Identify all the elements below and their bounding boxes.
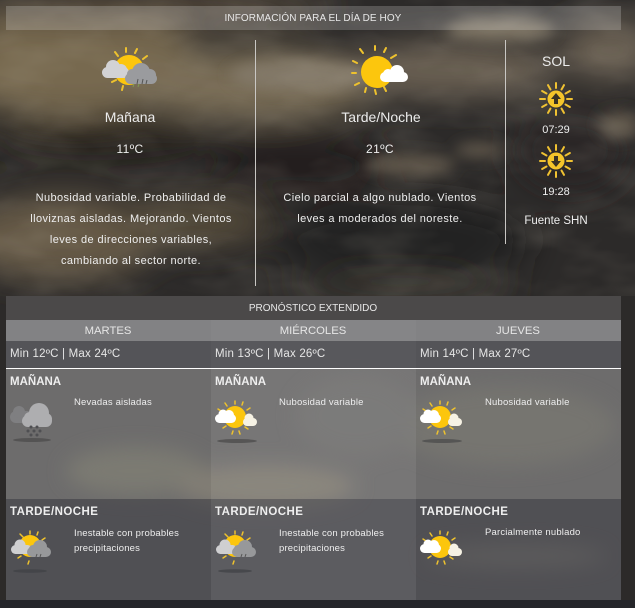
icon: sun clouds [215, 400, 257, 443]
description: leves de direcciones variables, [50, 234, 212, 246]
day: MARTES [85, 325, 131, 337]
column: miercoles [215, 324, 384, 573]
description: Nubosidad variable. Probabilidad de [36, 192, 226, 204]
min max: Min 12ºC | Max 24ºC [10, 348, 120, 360]
afternoon text: Inestable con probables [74, 528, 179, 539]
temperature: 11ºC [116, 142, 144, 156]
icon: sun clouds [420, 400, 462, 443]
panel: sun [524, 53, 588, 227]
afternoon text: Parcialmente nublado [485, 527, 580, 538]
min max: Min 13ºC | Max 26ºC [215, 348, 325, 360]
divider right [505, 40, 506, 244]
heading: PRONÓSTICO EXTENDIDO [249, 303, 377, 314]
morning text: Nubosidad variable [485, 397, 570, 408]
morning heading: MAÑANA [215, 376, 266, 388]
afternoon heading: TARDE/NOCHE [10, 506, 98, 518]
day: JUEVES [496, 325, 540, 337]
morning text: Nevadas aisladas [74, 397, 152, 408]
description: cambiando al sector norte. [61, 255, 201, 267]
column: martes [10, 325, 179, 572]
sunrise time: 07:29 [542, 124, 570, 136]
label: Mañana [105, 109, 155, 125]
divider left [255, 40, 256, 286]
icon: sunset [539, 144, 573, 178]
heading: SOL [542, 53, 570, 69]
afternoon text: precipitaciones [279, 543, 345, 554]
panel: morning today [30, 47, 232, 267]
forecast backdrop [6, 296, 621, 600]
label: Tarde/Noche [341, 109, 421, 125]
panel: afternoon today [283, 45, 477, 225]
description [30, 192, 232, 267]
min max: Min 14ºC | Max 27ºC [420, 348, 530, 360]
description [283, 192, 477, 225]
afternoon text [279, 528, 384, 554]
afternoon text: precipitaciones [74, 543, 140, 554]
description: lloviznas aisladas. Mejorando. Vientos [30, 213, 232, 225]
morning heading: MAÑANA [10, 376, 61, 388]
morning heading: MAÑANA [420, 376, 471, 388]
header: today: INFORMACIÓN PARA EL DÍA DE HOY [225, 13, 401, 24]
icon: sun with white cloud [351, 45, 408, 95]
day: MIÉRCOLES [280, 325, 346, 337]
icon: sun rain cloud [216, 530, 256, 573]
description: leves a moderados del noreste. [297, 213, 463, 225]
source: Fuente SHN [524, 215, 588, 227]
icon: snow cloud [10, 403, 52, 442]
icon: sun with rain cloud [102, 47, 157, 91]
afternoon heading: TARDE/NOCHE [420, 506, 508, 518]
icon: sun rain cloud [11, 530, 51, 572]
temperature: 21ºC [366, 142, 394, 156]
morning text: Nubosidad variable [279, 397, 364, 408]
afternoon text [74, 528, 179, 554]
afternoon heading: TARDE/NOCHE [215, 506, 303, 518]
description: Cielo parcial a algo nublado. Vientos [283, 192, 477, 204]
panel: extended forecast [6, 296, 621, 600]
icon: sun clouds [420, 530, 462, 565]
icon: sunrise [539, 82, 573, 116]
column: jueves [420, 325, 580, 565]
afternoon text: Inestable con probables [279, 528, 384, 539]
header: today [6, 6, 621, 30]
sunset time: 19:28 [542, 186, 570, 198]
